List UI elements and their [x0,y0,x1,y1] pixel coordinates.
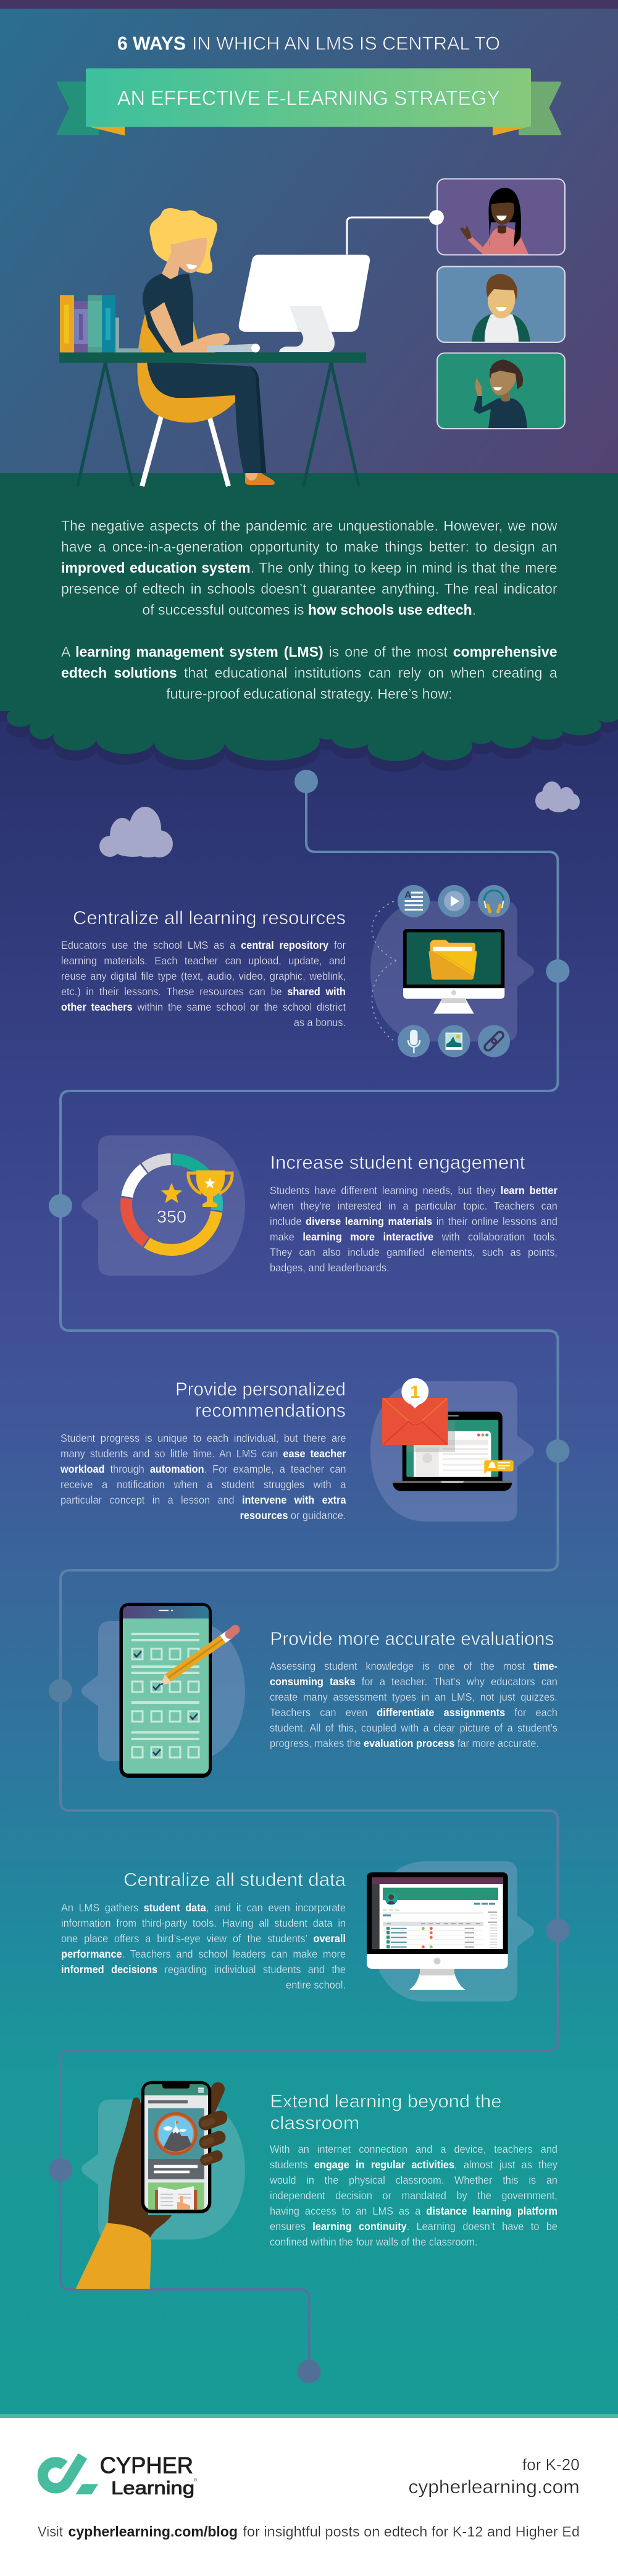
icon: star [161,1183,182,1203]
torso [143,274,193,353]
logo wordmark [100,2452,198,2499]
section 1 body text: as a bonus. [293,1016,345,1029]
intro paragraph one: have a once-in-a-generation opportunity to make things better: to design an [61,539,557,555]
title line one: IN WHICH AN LMS IS CENTRAL TO [192,32,500,54]
backdrop blob [370,901,534,1042]
icon: microphone [398,1025,430,1057]
node section five [546,1919,569,1942]
top strip [0,0,618,9]
backdrop blob [81,1621,245,1761]
section 4 graphic: assessment phone [81,1603,245,1778]
thumb [207,2089,218,2113]
large cloud [99,807,173,857]
section 1 body text: etc.) in their lessons. These resources can be shared with [61,985,345,998]
section 3 heading [175,1378,346,1421]
desktop monitor with folder [403,929,504,1014]
node section two [49,1194,72,1218]
icon: video play [438,885,470,917]
website: cypherlearning.com [409,2476,580,2498]
panel: video call student three [437,353,565,429]
section 2 body text: badges, and leaderboards. [270,1261,390,1274]
backdrop blob [370,1381,534,1522]
student three figure [474,360,527,428]
section 4 body text: Teachers can even differentiate assignments for each [270,1706,557,1719]
section 2 graphic: gamification [81,1135,245,1276]
icon: notification pin [401,1378,428,1408]
icon: trophy [188,1170,232,1207]
fingers [204,2118,220,2160]
section 1 heading: Centralize all learning resources [73,907,346,928]
sleeve [76,2223,151,2289]
desk legs [78,363,359,486]
desk top [59,352,366,363]
ribbon right fold [493,127,529,136]
trousers [147,362,266,473]
connector end node [298,2360,321,2383]
section 4 heading: Provide more accurate evaluations [270,1628,554,1649]
section 3 heading: recommendations [195,1400,346,1421]
logo wordmark: Learning [111,2478,194,2499]
checkboxes [132,1649,199,1757]
ribbon left tail [57,82,99,135]
section 6 body text: With an internet connection and a device, teachers and [270,2143,557,2155]
intro paragraph one: presence of edtech in schools doesn’t guarantee anything. The real indicator [61,581,557,597]
neck [162,252,180,279]
books [60,295,142,352]
backdrop blob [81,2099,245,2240]
node section four [49,1679,72,1703]
monitor stand [279,306,335,352]
section 3 heading: Provide personalized [175,1378,346,1400]
phone screen [123,1606,209,1774]
compass illustration [154,2112,198,2155]
chair [137,312,235,423]
node section six [49,2158,72,2182]
section 3 body text: many students and so little time. An LMS can ease teacher [61,1447,346,1460]
section 2 body text [270,1184,557,1274]
logo wordmark: CYPHER [100,2452,193,2478]
icon: picture [438,1025,470,1057]
node section one [546,959,569,983]
phone [141,2081,211,2213]
panel: video call student two [437,267,565,342]
section 1 body text: other teachers within the same school or the school district [61,1001,345,1013]
icon: text document: A [404,890,412,901]
intro paragraph two: edtech solutions that educational institutions can rely on when creating a [61,665,557,681]
cloud shadow [0,11,618,772]
section 4 body text: progress, makes the evaluation process far more accurate. [270,1737,539,1749]
side list [488,1913,497,1922]
audience label: for K-20 [522,2455,580,2473]
footer accent stripe [0,2414,618,2418]
connector start node [294,770,318,793]
monitor screen [372,1877,503,1949]
section 5 body text: informed decisions regarding individual students and the [61,1963,345,1976]
face [170,238,207,273]
section 5 graphic: student data monitor [367,1861,534,2001]
section 5 body text [61,1901,346,1991]
keyboard [207,343,260,352]
connector line through sections [61,781,558,2372]
connector node [429,210,444,225]
check marks [134,1651,198,1755]
small cloud [535,781,580,812]
section 6 body text: having access to an LMS as a distance learning platform [270,2205,557,2217]
section 6 heading: Extend learning beyond the [270,2092,501,2111]
intro paragraph two [61,644,557,702]
section 3 body text: particular concept in a lesson and intervene with extra [61,1494,346,1506]
call to action line: cypherlearning.com/blog [68,2523,238,2540]
icon: headphones [478,885,510,917]
monitor stand front [290,306,330,332]
monitor [239,255,370,332]
hand palm [108,2097,172,2237]
intro paragraph two: A learning management system (LMS) is one of the most comprehensive [61,644,557,660]
intro paragraph one: of successful outcomes is how schools use edtech. [142,602,476,618]
section 5 body text: An LMS gathers student data, and it can even incorporate [61,1901,345,1914]
folder [428,940,477,980]
panel: video call student one [437,179,565,255]
arm [150,302,241,353]
ribbon right tail [519,82,561,135]
points value: 350 [157,1207,186,1226]
section 3 body text: receive a notification when a student struggles with a [61,1478,346,1491]
phone body [120,1603,212,1778]
icon: red envelope [382,1398,448,1445]
section 4 body text [270,1659,557,1749]
intro paragraph two: future-proof educational strategy. Here’s how: [166,686,452,702]
page background gradient [0,680,618,2418]
section 1 body text: Educators use the school LMS as a central repository for [61,939,345,951]
section 5 heading: Centralize all student data [123,1869,346,1890]
section 3 body text: workload through automation. For example, a teacher can [61,1463,346,1475]
call to action line: Visit [38,2523,64,2540]
logo: Cypher Learning [43,2452,198,2499]
icon: pencil [161,1630,235,1685]
title ribbon banner [57,68,561,136]
section 3 body text: resources or guidance. [240,1509,346,1522]
section 1 body text: reuse any digital file type (text, audio, video, graphic, weblink, [61,970,345,982]
shoe [245,472,275,485]
section 6 heading [270,2092,501,2134]
section 6 body text: confined within the four walls of the classroom. [270,2236,478,2248]
trouser shadow [248,366,266,473]
section 2 body text: Students have different learning needs, but they learn better [270,1184,557,1196]
section 2 body text: when they’re interested in a particular topic. Teachers can [270,1200,557,1212]
smile [186,264,198,269]
chair legs [142,414,228,486]
monitor body [367,1872,508,1954]
section 2 body text: They can also include gamified elements, such as points, [270,1245,557,1258]
footer panel [0,2418,618,2576]
student two figure [472,274,530,342]
icon: notification pin: 1 [410,1383,420,1402]
ribbon heading: AN EFFECTIVE E-LEARNING STRATEGY [117,86,500,109]
section 5 body text: one place offers a bird’s-eye view of the students’ overall [61,1932,345,1945]
node section three [546,1439,569,1463]
section 2 body text: make learning more interactive with collaboration tools. [270,1231,557,1243]
logo wordmark: ® [194,2478,198,2483]
section 5 body text: performance. Teachers and school leaders can make more [61,1948,345,1960]
section 5 body text: information from third-party tools. Having all student data in [61,1917,345,1929]
section 6 body text: students engage in regular activities, almost just as they [270,2158,557,2171]
section 2 body text: include diverse learning materials in their online lessons and [270,1214,557,1227]
section 4 body text: Assessing student knowledge is one of the most time- [270,1659,557,1672]
title line one: 6 WAYS [117,32,186,54]
section 2 heading: Increase student engagement [270,1151,525,1173]
section 6 body text: ensures learning continuity. Learning doesn’t have to be [270,2220,557,2233]
backdrop blob [81,1135,245,1276]
hair [149,208,217,274]
hero background [0,8,618,478]
panel: green intro cloud [0,473,618,761]
section 6 graphic: hand holding phone [76,2081,245,2289]
illustration: teacher at desk [59,208,370,486]
connector: monitor to video panels [347,217,432,255]
section 1 body text [61,939,346,1029]
section 6 heading: classroom [270,2113,359,2134]
intro paragraph one: The negative aspects of the pandemic are unquestionable. However, we now [61,518,557,534]
section 5 body text: entire school. [286,1979,345,1991]
book illustration [148,2182,204,2210]
data rows [383,1927,483,1948]
call to action line [38,2523,580,2540]
section 1 body text: learning materials. Each teacher can upload, update, and [61,954,345,967]
logo mark [43,2456,98,2494]
call to action line: for insightful posts on edtech for K-12 and Higher Ed [243,2523,580,2540]
section 6 body text: would in the physical classroom. Whether this is an [270,2174,557,2186]
ribbon main band [86,68,531,127]
icon: notification chip [484,1460,514,1474]
laptop [393,1412,512,1491]
section 3 body text [61,1432,346,1522]
section 4 body text: create many assessment types in an LMS, not just quizzes. [270,1690,557,1703]
section 4 body text: student. All of this, coupled with a clear picture of a student’s [270,1721,557,1733]
section 6 body text: independent decision or mandated by the government, [270,2189,557,2202]
intro paragraph one [61,518,557,618]
section 3 body text: Student progress is unique to each individual, but there are [61,1432,346,1444]
envelope shadow [406,1420,455,1452]
backdrop blob [370,1861,534,2001]
progress ring [126,1159,217,1250]
section 1 graphic: learning resources [370,885,534,1057]
monitor stand [409,1969,466,1990]
student one figure [460,188,528,255]
section 3 graphic: notifications [370,1378,534,1522]
section 4 body text: consuming tasks for a teacher. That’s why educators can [270,1675,557,1688]
dashed arrows [372,901,396,1041]
intro paragraph one: improved education system. The only thing to keep in mind is that the mere [61,560,557,576]
ribbon left fold [88,127,125,136]
icon: text document [398,885,430,917]
icon: link [478,1025,510,1057]
section 6 body text [270,2143,557,2248]
clouds [99,781,580,857]
